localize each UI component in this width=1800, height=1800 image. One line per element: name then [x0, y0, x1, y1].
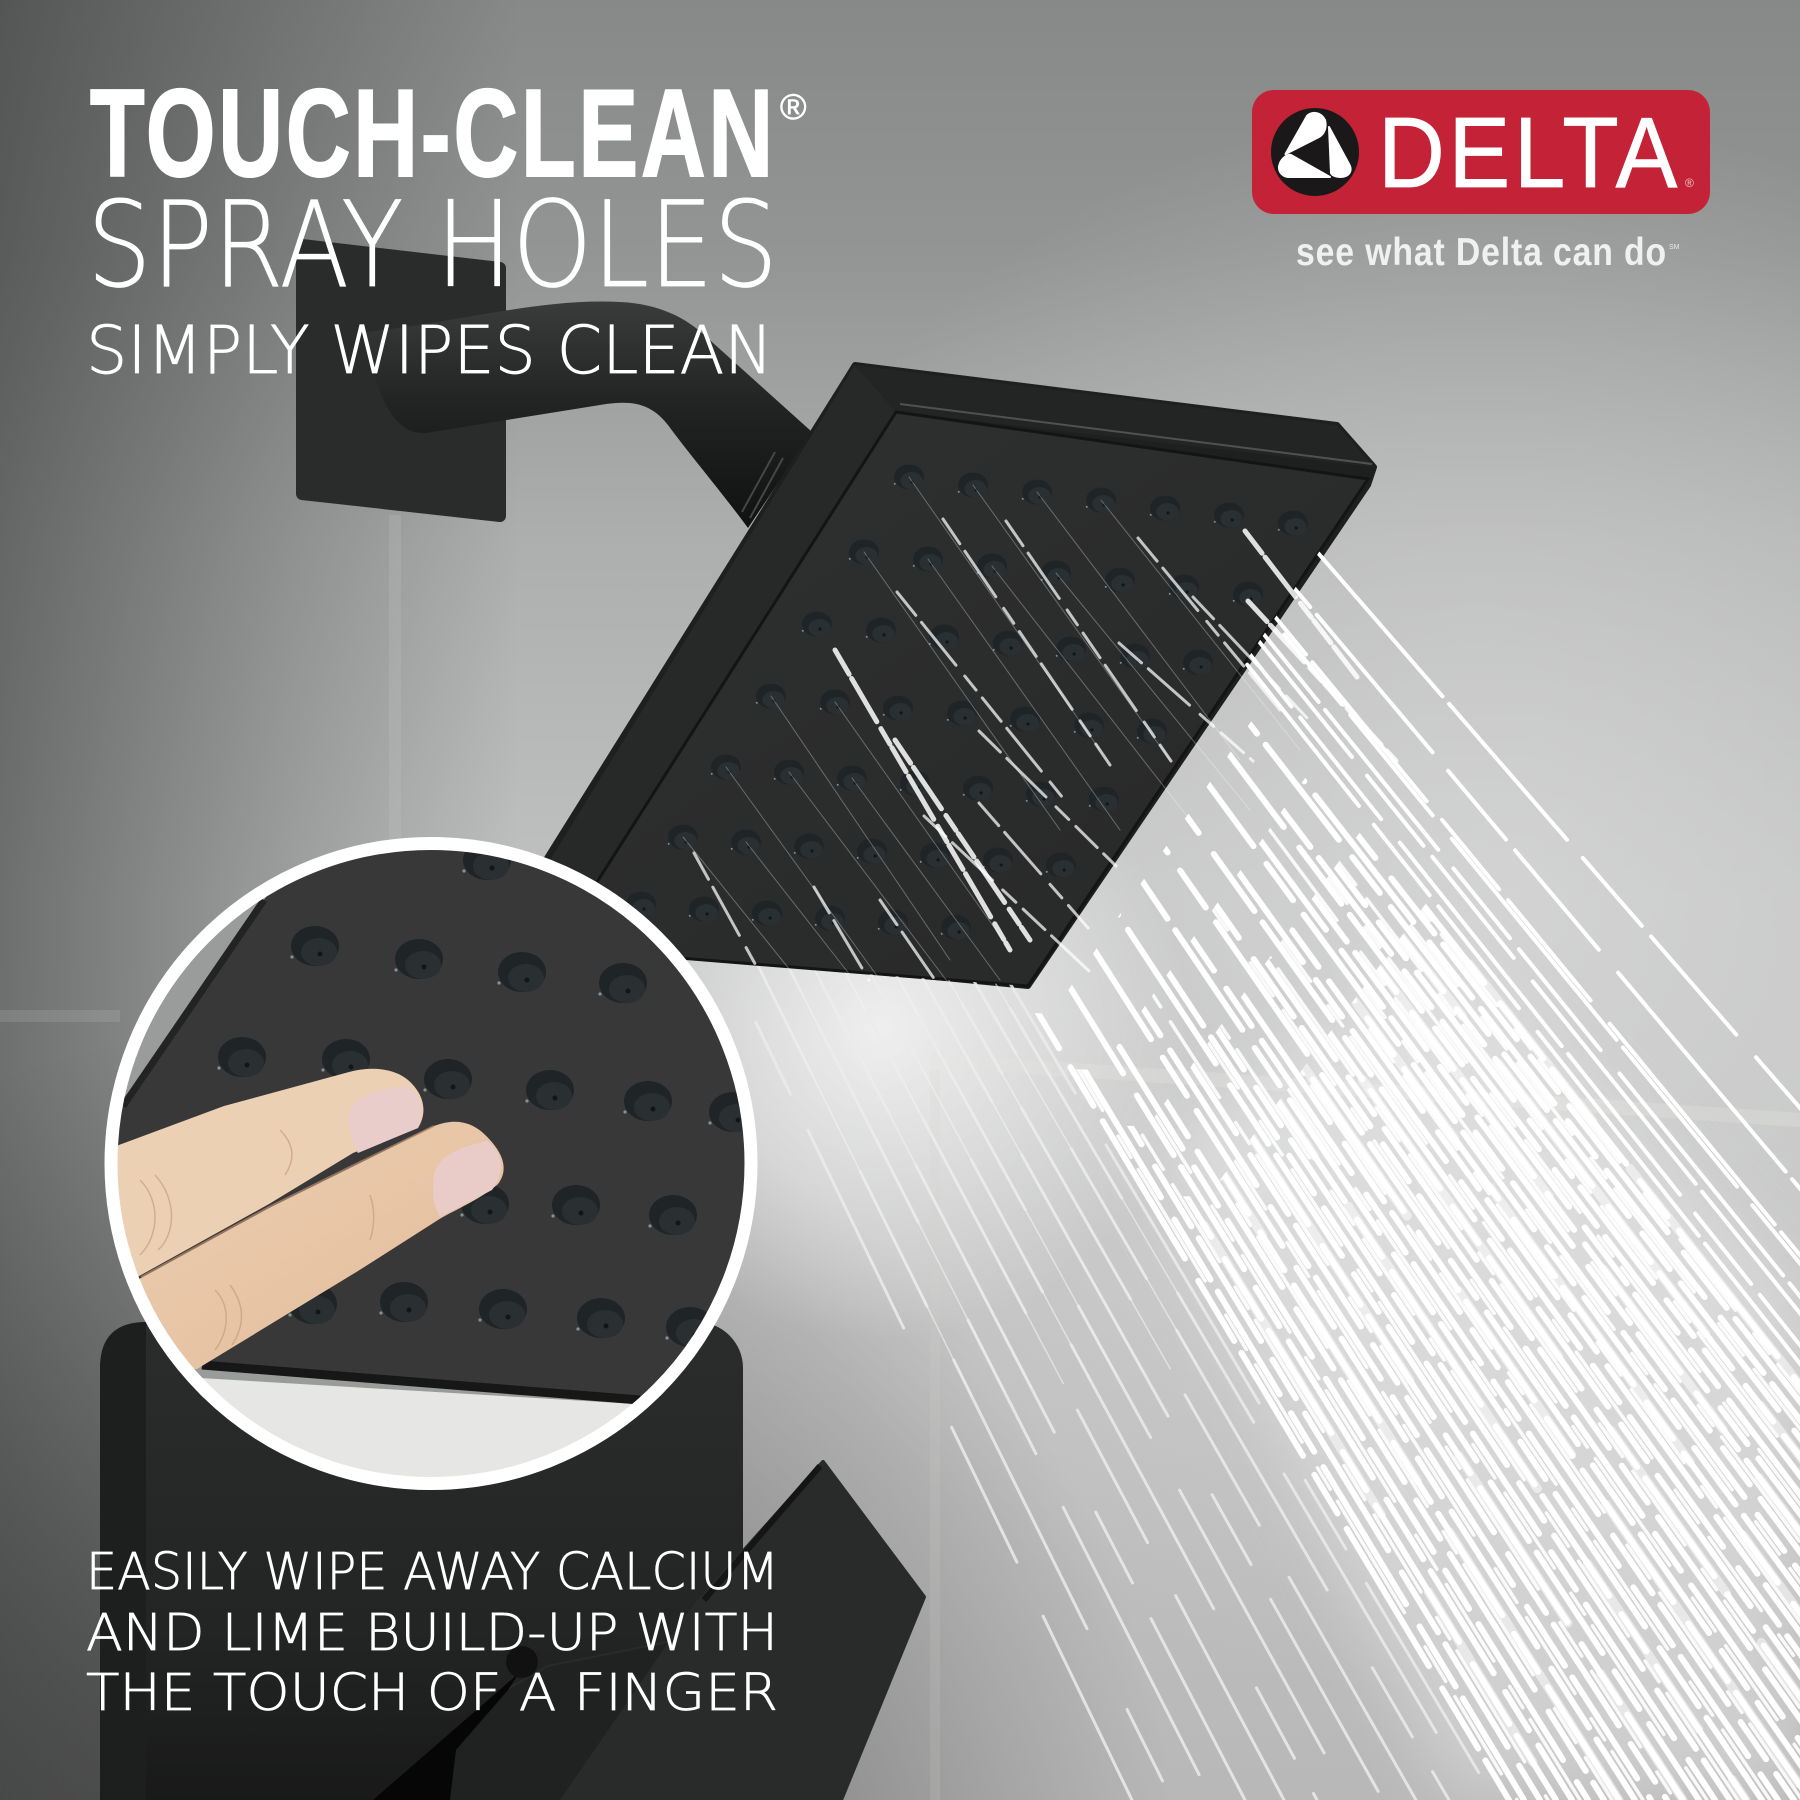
- second finger: [100, 1122, 504, 1369]
- registered mark: ®: [780, 86, 807, 127]
- magnified detail circle: [100, 830, 770, 1500]
- tagline: SM: [1669, 244, 1680, 251]
- first finger: [118, 1068, 424, 1276]
- tagline: see what Delta can do: [1296, 231, 1667, 274]
- shower head face: [555, 412, 1368, 986]
- dense spray, staggered start four: [1183, 904, 1800, 1800]
- caption text: [86, 1543, 779, 1723]
- caption text: AND LIME BUILD-UP WITH: [86, 1604, 778, 1663]
- logo emblem: [1271, 108, 1359, 196]
- tub valve trim plate: [100, 1322, 743, 1800]
- circle wall backdrop: [124, 928, 632, 1404]
- right strands: [1245, 552, 1800, 1367]
- fingernail one: [349, 1086, 422, 1153]
- thin upper strands on left: [800, 970, 1178, 1384]
- water strands on the face: [683, 477, 1396, 985]
- heading: SPRAY HOLES: SPRAY HOLES: [87, 177, 778, 315]
- soft bright spray haze: [1150, 950, 1800, 1800]
- wall escutcheon: [302, 245, 500, 516]
- shower arm: [366, 302, 812, 528]
- caption text: EASILY WIPE AWAY CALCIUM: [86, 1543, 779, 1602]
- caption text: THE TOUCH OF A FINGER: [86, 1664, 778, 1723]
- title: TOUCH-CLEAN: TOUCH-CLEAN: [90, 65, 776, 203]
- water spray: [754, 552, 1800, 1800]
- logo registered mark: ®: [1685, 176, 1694, 190]
- circle white ring: [111, 844, 751, 1484]
- Delta logo: [1252, 90, 1710, 214]
- magnified shower face: [118, 850, 744, 1397]
- magnified spray holes: [217, 840, 757, 1347]
- subheading: SIMPLY WIPES CLEAN: SIMPLY WIPES CLEAN: [86, 312, 773, 389]
- fingernail two: [433, 1141, 501, 1217]
- dense spray, staggered start three: [1127, 833, 1800, 1800]
- dense spray, staggered start one: [1034, 721, 1800, 1800]
- sparse strands on left: [754, 966, 1480, 1800]
- white wall below face: [202, 1378, 632, 1477]
- finger wrinkles: [140, 1126, 434, 1350]
- spray holes on head: [626, 465, 1308, 939]
- dense spray, staggered start two: [1076, 778, 1800, 1800]
- logo wordmark: DELTA: [1378, 97, 1681, 209]
- shower head: [500, 365, 1374, 986]
- handle lever: [373, 1462, 924, 1800]
